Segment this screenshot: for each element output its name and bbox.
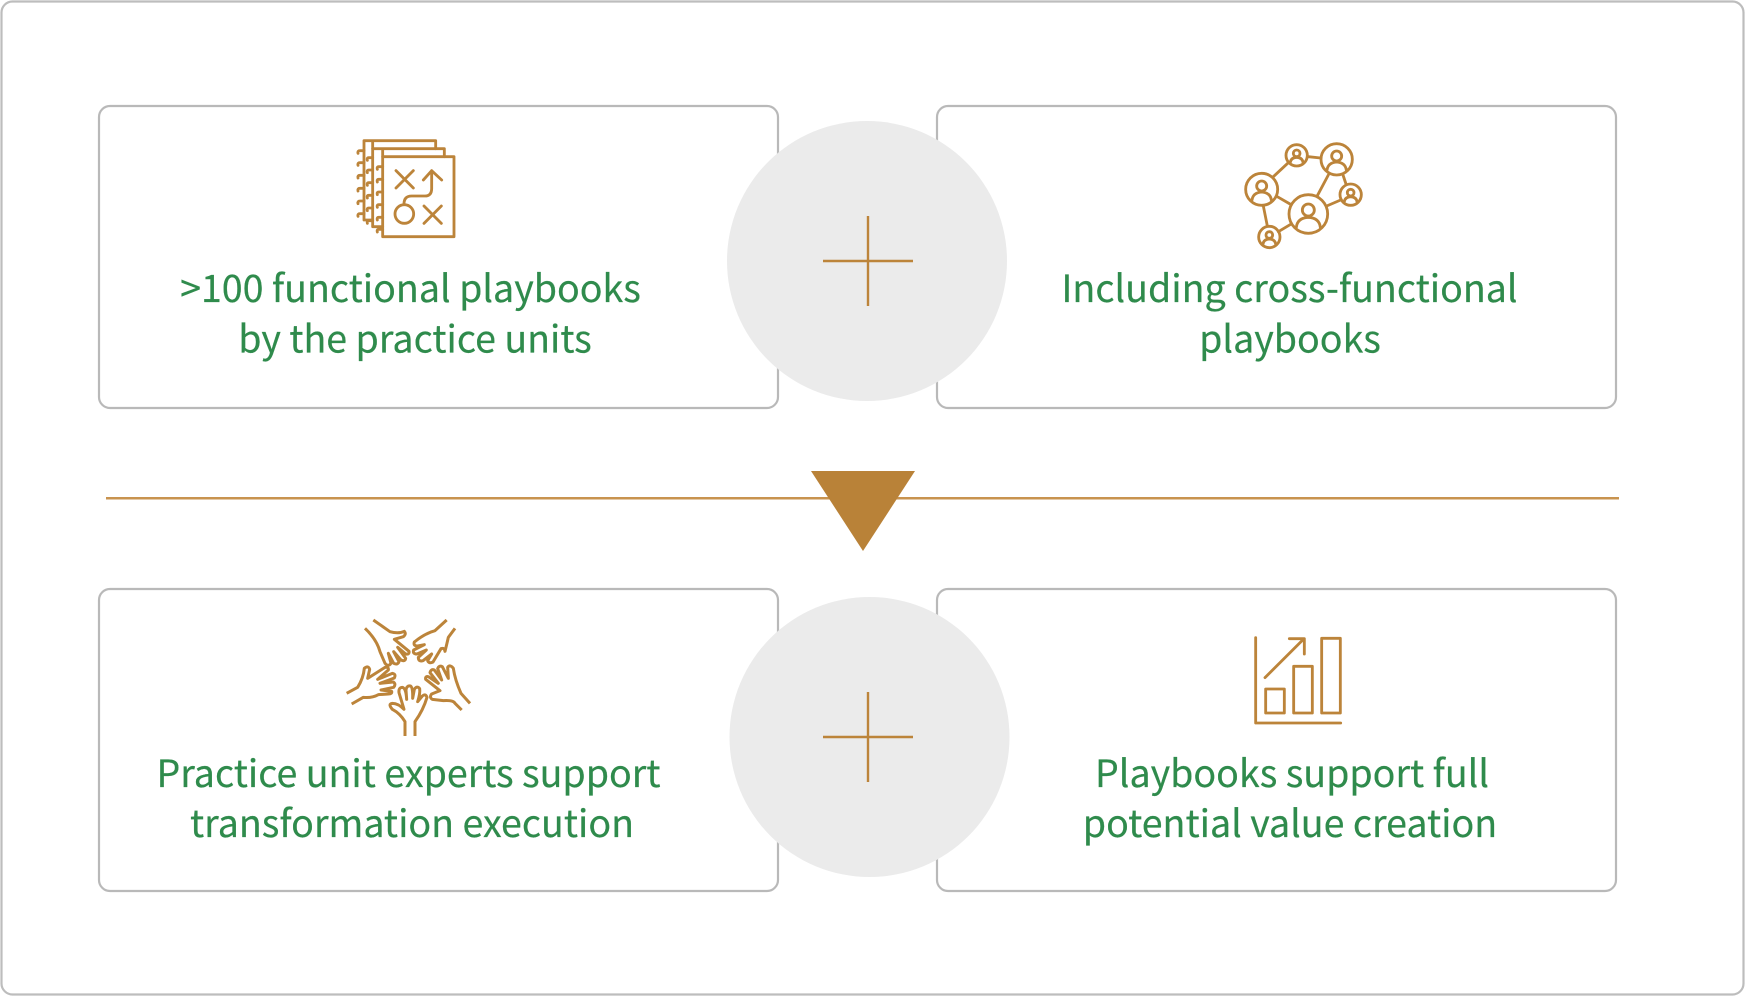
panel: functional playbooks [99,106,778,408]
text: cross-functional playbooks [1061,258,1518,364]
panel: value creation [937,589,1616,891]
text: value creation: potential value creation [1083,793,1497,848]
text: functional playbooks: >100 functional playbooks [180,258,641,313]
text: functional playbooks [180,258,641,364]
text: value creation [1083,743,1497,848]
circle with plus: bottom [730,597,1010,877]
icon: joined hands [347,620,470,736]
icon: people network [1246,144,1361,248]
text: functional playbooks: by the practice units [238,308,592,364]
text: cross-functional playbooks: playbooks [1199,308,1381,364]
text: practice unit experts [156,743,661,848]
text: practice unit experts: Practice unit experts support [156,743,661,798]
panel: practice unit experts [99,589,778,891]
circle with plus: top [727,121,1007,401]
arrow: down triangle [811,471,915,551]
text: practice unit experts: transformation execution [190,793,634,848]
panel: cross-functional playbooks [937,106,1616,408]
divider line [106,497,1619,500]
text: value creation: Playbooks support full [1095,743,1489,798]
icon: growth bar chart [1256,638,1341,723]
text: cross-functional playbooks: Including cross-functional [1061,258,1518,313]
icon: stacked playbooks [358,141,454,237]
